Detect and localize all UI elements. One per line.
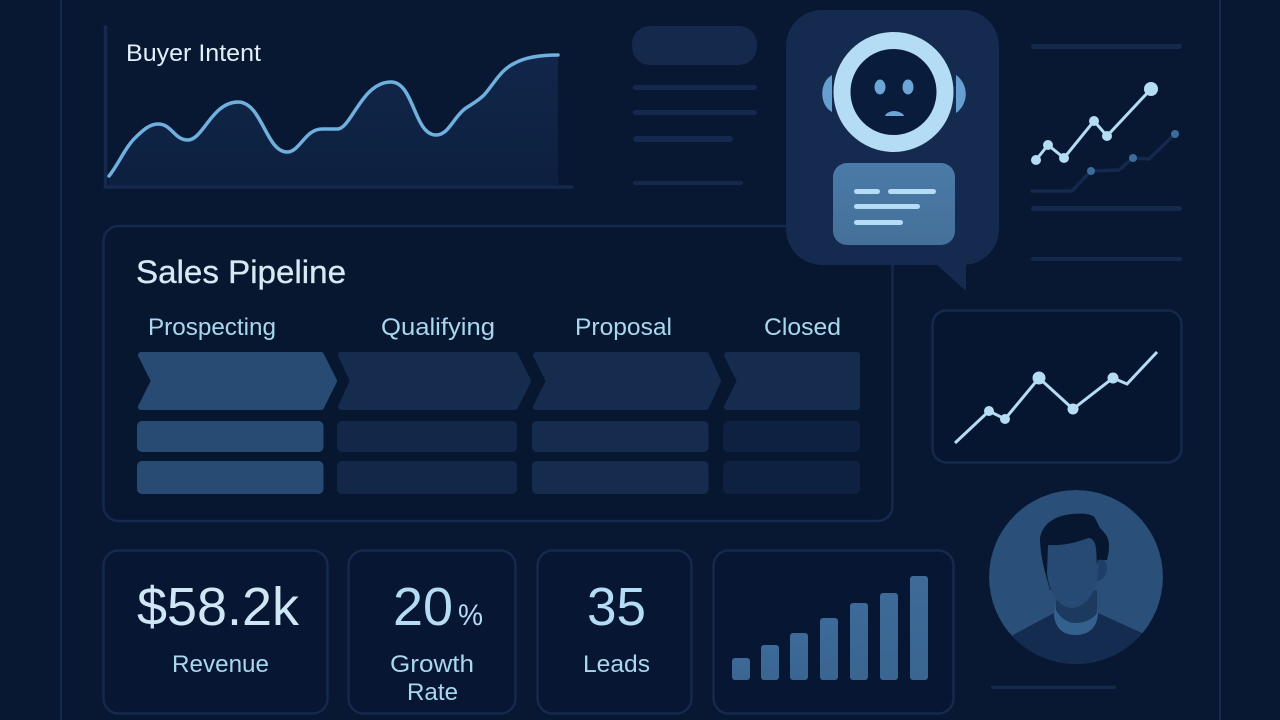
heading: sales pipeline: Sales Pipeline (136, 254, 346, 290)
stat card: growth rate: % (458, 599, 483, 632)
chart axes (106, 27, 572, 187)
stat card: leads (538, 550, 692, 714)
secondary line series (1032, 130, 1179, 191)
stat card: leads: Leads (583, 651, 650, 678)
trend line (955, 352, 1157, 443)
placeholder text block (632, 26, 757, 185)
stat card: revenue (104, 550, 328, 714)
buyer intent line (109, 55, 558, 176)
stat card: revenue: Revenue (172, 651, 269, 678)
stat card: growth rate: Rate (407, 679, 458, 706)
stat card: growth rate: 20 (393, 577, 453, 637)
avatar caption line (991, 686, 1116, 689)
stage labels: Closed (764, 314, 841, 341)
area under buyer intent curve (109, 55, 558, 185)
stat card: growth rate (348, 550, 516, 714)
bar chart card (714, 550, 954, 714)
ear (1097, 560, 1107, 581)
icon: robot head (822, 40, 966, 144)
panel: trend chart card (932, 310, 1182, 462)
panel: top right line charts (1031, 44, 1182, 261)
placeholder pill (632, 26, 757, 65)
stage labels (148, 314, 841, 341)
primary line series (1031, 82, 1158, 165)
stat card: growth rate: Growth (390, 651, 474, 678)
stat card: leads: 35 (587, 577, 646, 637)
heading: buyer intent: Buyer Intent (126, 40, 261, 67)
icon: user avatar (989, 490, 1163, 680)
pipeline rows (137, 421, 860, 494)
panel: buyer intent chart (106, 27, 572, 187)
stage chevrons (141, 355, 857, 407)
face (1047, 538, 1097, 608)
collar (1054, 604, 1098, 635)
panel: sales pipeline (104, 226, 892, 521)
bars (732, 576, 928, 680)
speech bubble with robot (786, 10, 999, 291)
stage labels: Qualifying (381, 314, 495, 341)
stage labels: Proposal (575, 314, 672, 341)
bubble tail (936, 262, 966, 291)
stage labels: Prospecting (148, 314, 276, 341)
stat card: revenue: $58.2k (137, 577, 300, 637)
hair (1040, 514, 1109, 590)
message card (833, 163, 955, 245)
shoulders (1012, 613, 1142, 664)
neck (1056, 590, 1097, 623)
